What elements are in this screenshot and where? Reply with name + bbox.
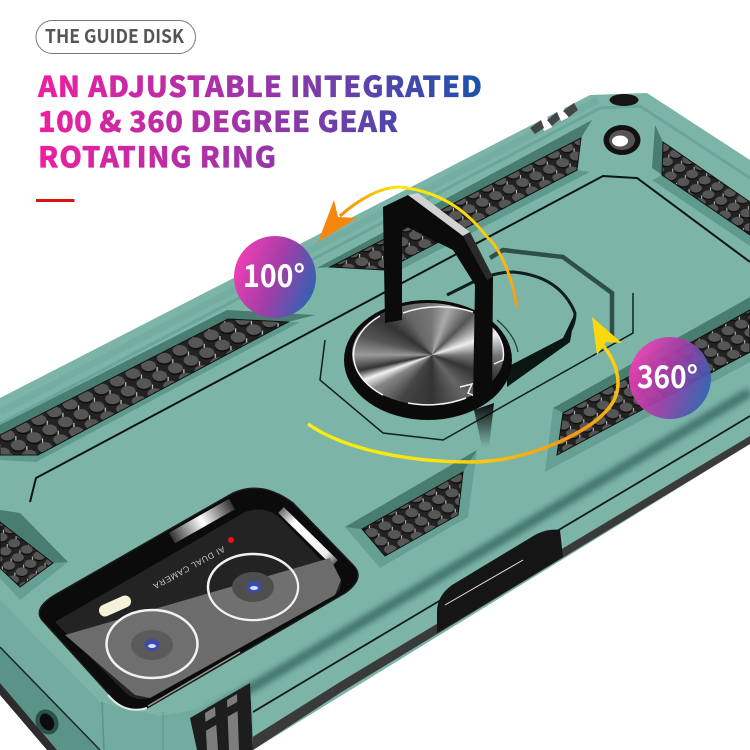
camera plate [55, 510, 341, 699]
side button [437, 530, 563, 633]
grip: top centre [317, 120, 592, 270]
bezel highlights [108, 504, 335, 710]
buttons and ports at top [530, 94, 640, 155]
case upper rim shading [0, 100, 750, 424]
arrow: 100 degree rotation [318, 187, 517, 307]
grip: top right [652, 125, 750, 246]
headline: ROTATING RING [38, 134, 276, 176]
plate lighter half [65, 558, 341, 698]
grip strips [0, 120, 750, 600]
rotating ring assembly [344, 193, 575, 447]
lens: left [106, 610, 198, 678]
ring drop shadow [474, 403, 494, 447]
grip: right [545, 297, 750, 472]
inner panel outline [30, 176, 750, 502]
bottom-left corner facet [0, 600, 253, 750]
flash [97, 594, 133, 618]
headphone jack [31, 705, 63, 739]
disc white rim arcs [354, 307, 503, 405]
ring recess octagon [320, 250, 633, 440]
metal spun disc [352, 303, 504, 405]
grip: bottom centre [345, 450, 477, 568]
label: ai dual camera: AI DUAL CAMERA [151, 544, 227, 591]
badge: 360 degrees: 360° [637, 352, 698, 397]
striped bottom port [190, 683, 253, 750]
badge: 100 degrees: 100° [243, 251, 305, 296]
headline: 100 & 360 DEGREE GEAR [38, 99, 398, 141]
kickstand [383, 193, 493, 400]
red accent line [36, 199, 74, 202]
grip: bottom left [0, 510, 68, 600]
header: badge, headline and accent [36, 20, 482, 202]
top hole [610, 94, 638, 106]
side band and dark edge [232, 436, 750, 750]
headline: AN ADJUSTABLE INTEGRATED [37, 64, 482, 106]
lower side band shading [160, 392, 750, 742]
badge: 360 degrees [629, 337, 711, 419]
red dot [228, 537, 234, 543]
black base disc [344, 300, 512, 420]
lens: right [208, 554, 298, 620]
volume buttons [530, 103, 578, 134]
badge: 100 degrees [234, 236, 316, 318]
camera bezel [39, 488, 358, 710]
headline [37, 64, 482, 176]
grip: left [0, 310, 315, 462]
lower side seam [253, 416, 750, 712]
screw hole [604, 125, 640, 155]
badge: the guide disk: THE GUIDE DISK [45, 22, 185, 49]
flat ring loop [447, 272, 575, 387]
camera module [39, 488, 358, 710]
arrow: 360 degree rotation [308, 317, 622, 462]
